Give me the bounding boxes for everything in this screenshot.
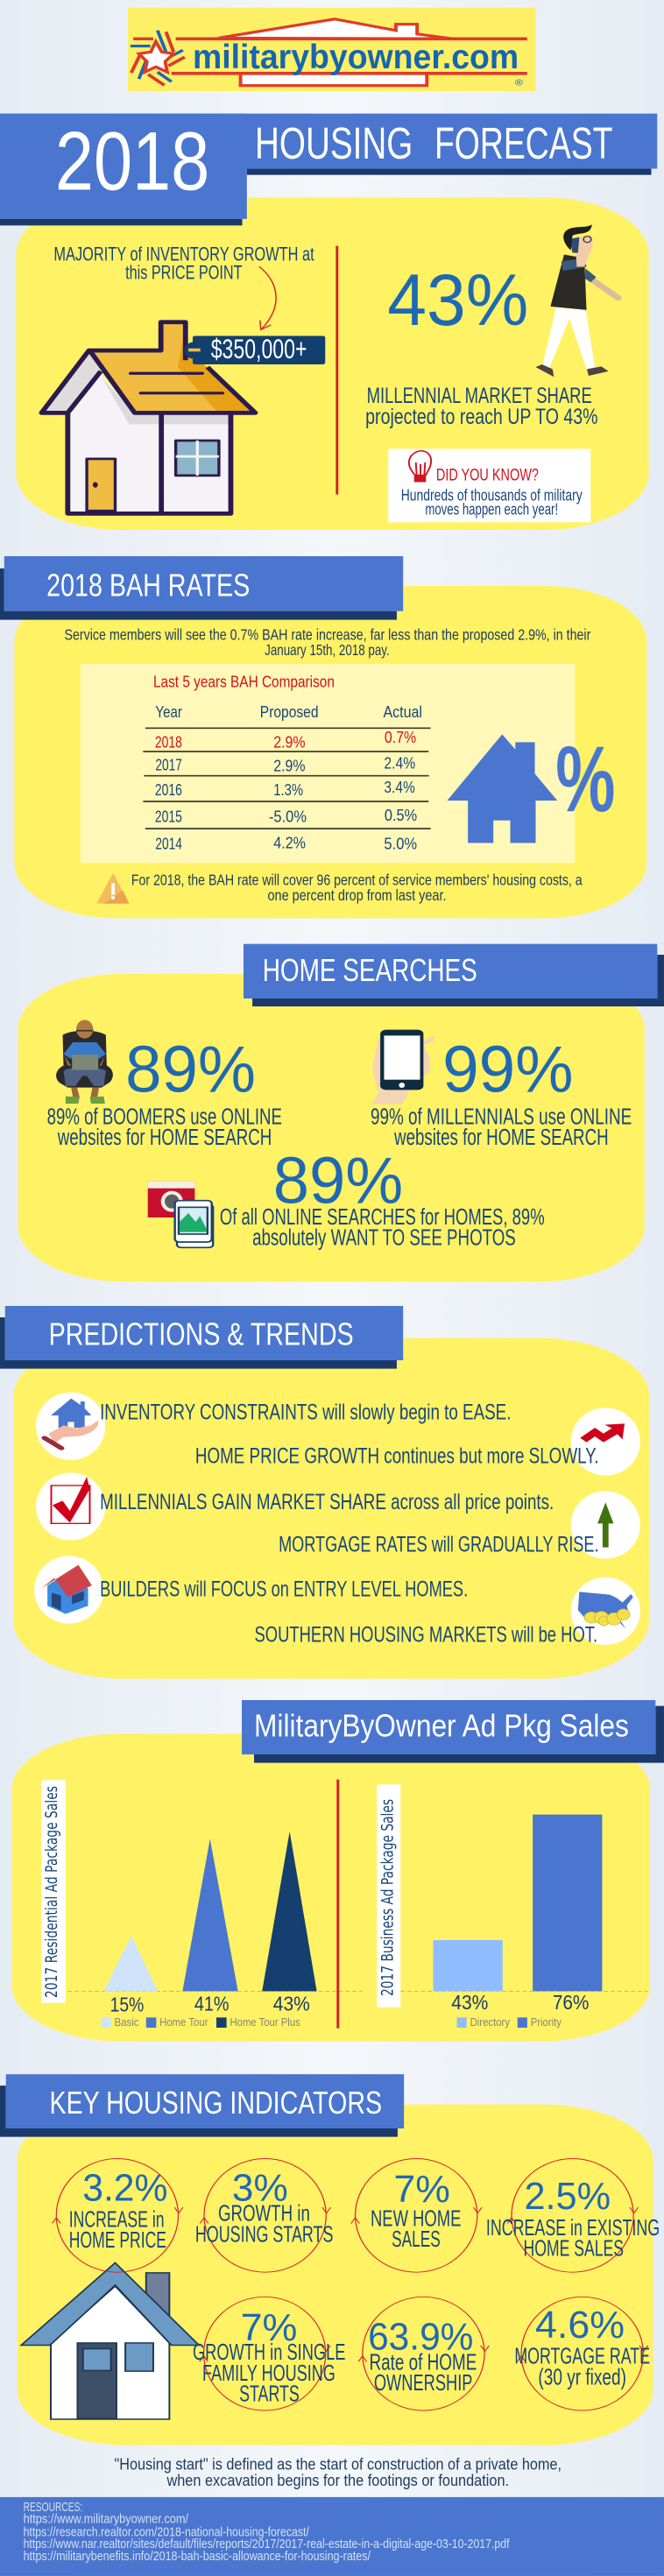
price tag	[184, 334, 325, 364]
indicator: mortgage rate: 4.6%	[535, 2303, 625, 2346]
icon: up arrow	[571, 1491, 640, 1559]
inventory text: this PRICE POINT	[125, 262, 243, 284]
table: bah comparison: 2018	[155, 733, 182, 752]
icon: house in hand	[36, 1393, 105, 1460]
icon: us map	[571, 1577, 640, 1645]
indicator: new home sales: NEW HOME	[371, 2206, 461, 2232]
header: home searches	[244, 944, 664, 1006]
header: 2018 bah rates	[0, 556, 403, 620]
chart: business ad packages: 43%	[451, 1991, 488, 2014]
indicator: home price: INCREASE in	[69, 2207, 165, 2232]
intro text	[64, 626, 590, 659]
intro text: January 15th, 2018 pay.	[265, 641, 390, 659]
section: key housing indicators	[0, 2074, 664, 2576]
icon: checkbox	[36, 1472, 105, 1541]
panel: predictions	[13, 1338, 649, 1679]
stat: boomers	[47, 1032, 282, 1150]
indicator: home price: 3.2%	[82, 2166, 167, 2209]
stat: 43%: 43%	[387, 258, 528, 341]
chart: residential ad packages: 2017 Residential Ad Package Sales	[41, 1786, 60, 1998]
icon: house percent	[447, 727, 615, 843]
icon: house	[41, 322, 255, 513]
table: bah comparison: 0.7%	[385, 728, 416, 746]
indicator: new home sales: SALES	[392, 2227, 441, 2252]
table: bah comparison: 0.5%	[385, 806, 417, 824]
indicator: single family starts: GROWTH in SINGLE	[193, 2340, 345, 2365]
section: ad package sales	[12, 1700, 664, 2042]
chart: residential ad packages: Home Tour	[159, 2017, 208, 2029]
section: home searches: 89% of BOOMERS use ONLINE	[47, 1104, 282, 1129]
table: bah comparison: 2017	[155, 756, 182, 774]
header: 2018 bah rates: 2018 BAH RATES	[46, 568, 250, 603]
note text	[131, 872, 583, 904]
indicator: new home sales	[351, 2158, 482, 2272]
indicator: new home sales: 7%	[394, 2167, 450, 2210]
icon: man with laptop	[56, 1020, 113, 1104]
indicator: single family starts	[193, 2297, 345, 2410]
indicator: home ownership	[358, 2297, 489, 2410]
header: key housing indicators: KEY HOUSING INDICATORS	[50, 2085, 382, 2121]
inventory text	[53, 243, 314, 284]
table: bah comparison: 2014	[155, 834, 182, 852]
table: bah comparison: 3.4%	[384, 778, 415, 796]
footer: resources: RESOURCES:	[24, 2499, 82, 2514]
panel: inventory and millennials	[16, 197, 649, 530]
note text: one percent drop from last year.	[268, 886, 447, 904]
chart: residential ad packages: 41%	[194, 1993, 230, 2015]
footer: resources: https://research.realtor.com/2018-national-housing-forecast/	[24, 2524, 309, 2539]
stat: boomers: 89%	[125, 1032, 256, 1106]
icon: large house	[21, 2262, 199, 2419]
stat: photos: 89%	[273, 1143, 403, 1217]
header: key housing indicators	[0, 2074, 404, 2137]
callout: did you know: moves happen each year!	[425, 501, 558, 519]
table: bah comparison: 2.9%	[273, 733, 306, 752]
arrow to price	[259, 266, 276, 329]
divider line	[336, 1780, 339, 2029]
indicator: existing home sales	[486, 2158, 660, 2272]
table: bah comparison: 5.0%	[384, 834, 417, 852]
chart: business ad packages	[377, 1784, 648, 2029]
panel: ad sales	[12, 1733, 650, 2042]
stat: photos	[220, 1143, 545, 1250]
inventory text: MAJORITY of INVENTORY GROWTH at	[53, 243, 314, 265]
indicator: single family starts: FAMILY HOUSING	[202, 2361, 336, 2386]
panel: searches	[18, 974, 645, 1281]
table: bah comparison: 4.2%	[273, 833, 306, 851]
callout: did you know	[388, 448, 590, 522]
table: bah comparison: 2016	[155, 780, 182, 799]
panel: indicators	[18, 2105, 653, 2445]
indicator: single family starts: STARTS	[239, 2382, 300, 2407]
indicator: home price	[52, 2158, 183, 2272]
footer: resources: https://www.militarybyowner.com/	[24, 2511, 188, 2526]
stat: millennials	[371, 1032, 632, 1150]
icon: camera and photos	[148, 1181, 213, 1247]
indicator: housing starts: GROWTH in	[218, 2201, 310, 2227]
logo: ®	[515, 79, 524, 88]
chart: residential ad packages	[41, 1780, 362, 2029]
indicator: existing home sales: 2.5%	[524, 2174, 611, 2217]
icon: warning	[96, 873, 129, 904]
table: bah comparison: Year	[155, 702, 182, 721]
header: 2018 housing forecast	[0, 114, 657, 225]
header: predictions and trends: PREDICTIONS & TRENDS	[49, 1316, 354, 1352]
icon: builder house	[34, 1556, 103, 1624]
chart: residential ad packages: Basic	[115, 2017, 139, 2029]
header: ad pkg sales	[242, 1700, 664, 1763]
chart: residential ad packages: Home Tour Plus	[230, 2017, 300, 2029]
panel: bah	[14, 586, 646, 918]
definition note	[115, 2455, 562, 2489]
chart: business ad packages: Directory	[470, 2017, 510, 2029]
chart: business ad packages: 76%	[553, 1991, 589, 2014]
stat: boomers: websites for HOME SEARCH	[57, 1125, 272, 1150]
header: 2018 housing forecast: HOUSING	[255, 118, 413, 168]
header: 2018 housing forecast: 2018	[55, 116, 209, 208]
table: bah comparison	[81, 664, 575, 863]
icon: person on phone	[536, 224, 618, 377]
indicator: housing starts: HOUSING STARTS	[195, 2222, 333, 2247]
table: bah comparison: 2015	[155, 807, 182, 825]
definition note: when excavation begins for the footings or foundation.	[166, 2472, 509, 2489]
indicator: home ownership: Rate of HOME	[370, 2350, 477, 2375]
icon: phone in hand	[371, 1030, 434, 1105]
callout: did you know: DID YOU KNOW?	[436, 465, 539, 484]
section: home searches	[18, 944, 664, 1281]
table: bah comparison: Actual	[383, 702, 422, 721]
indicator: single family starts: 7%	[241, 2305, 297, 2348]
logo	[128, 8, 536, 91]
section: predictions and trends	[0, 1306, 649, 1679]
table: bah comparison: -5.0%	[269, 807, 307, 825]
header: predictions and trends	[0, 1306, 403, 1369]
table: bah comparison: 2.9%	[273, 756, 306, 774]
chart: business ad packages: 2017 Business Ad Package Sales	[378, 1799, 397, 1996]
header: home searches: HOME SEARCHES	[263, 952, 477, 988]
indicator: housing starts	[195, 2158, 333, 2272]
section: bah rates	[0, 556, 646, 918]
logo: militarybyowner.com	[193, 39, 519, 76]
indicator: housing starts: 3%	[232, 2166, 288, 2209]
stat: millennials: 99%	[442, 1032, 574, 1106]
indicator: home ownership: 63.9%	[368, 2315, 473, 2358]
footer: resources: https://militarybenefits.info/2018-bah-basic-allowance-for-housing-rates/	[24, 2548, 371, 2564]
indicator: home ownership: OWNERSHIP	[374, 2371, 472, 2396]
table: bah comparison: Proposed	[260, 702, 319, 721]
chart: residential ad packages: 15%	[110, 1994, 144, 2015]
table: bah comparison: Last 5 years BAH Comparison	[153, 672, 335, 690]
footer: resources	[0, 2497, 664, 2576]
indicator: home price: HOME PRICE	[69, 2228, 166, 2253]
indicator: mortgage rate	[514, 2297, 650, 2410]
chart: business ad packages: Priority	[531, 2017, 562, 2029]
millennial text	[365, 383, 598, 428]
section: forecast	[0, 8, 657, 530]
chart: residential ad packages: 43%	[273, 1993, 310, 2015]
table: bah comparison: 1.3%	[273, 780, 303, 799]
price tag: $350,000+	[211, 334, 307, 364]
table: bah comparison: 2.4%	[384, 753, 415, 772]
icon: rising arrow	[571, 1408, 640, 1476]
